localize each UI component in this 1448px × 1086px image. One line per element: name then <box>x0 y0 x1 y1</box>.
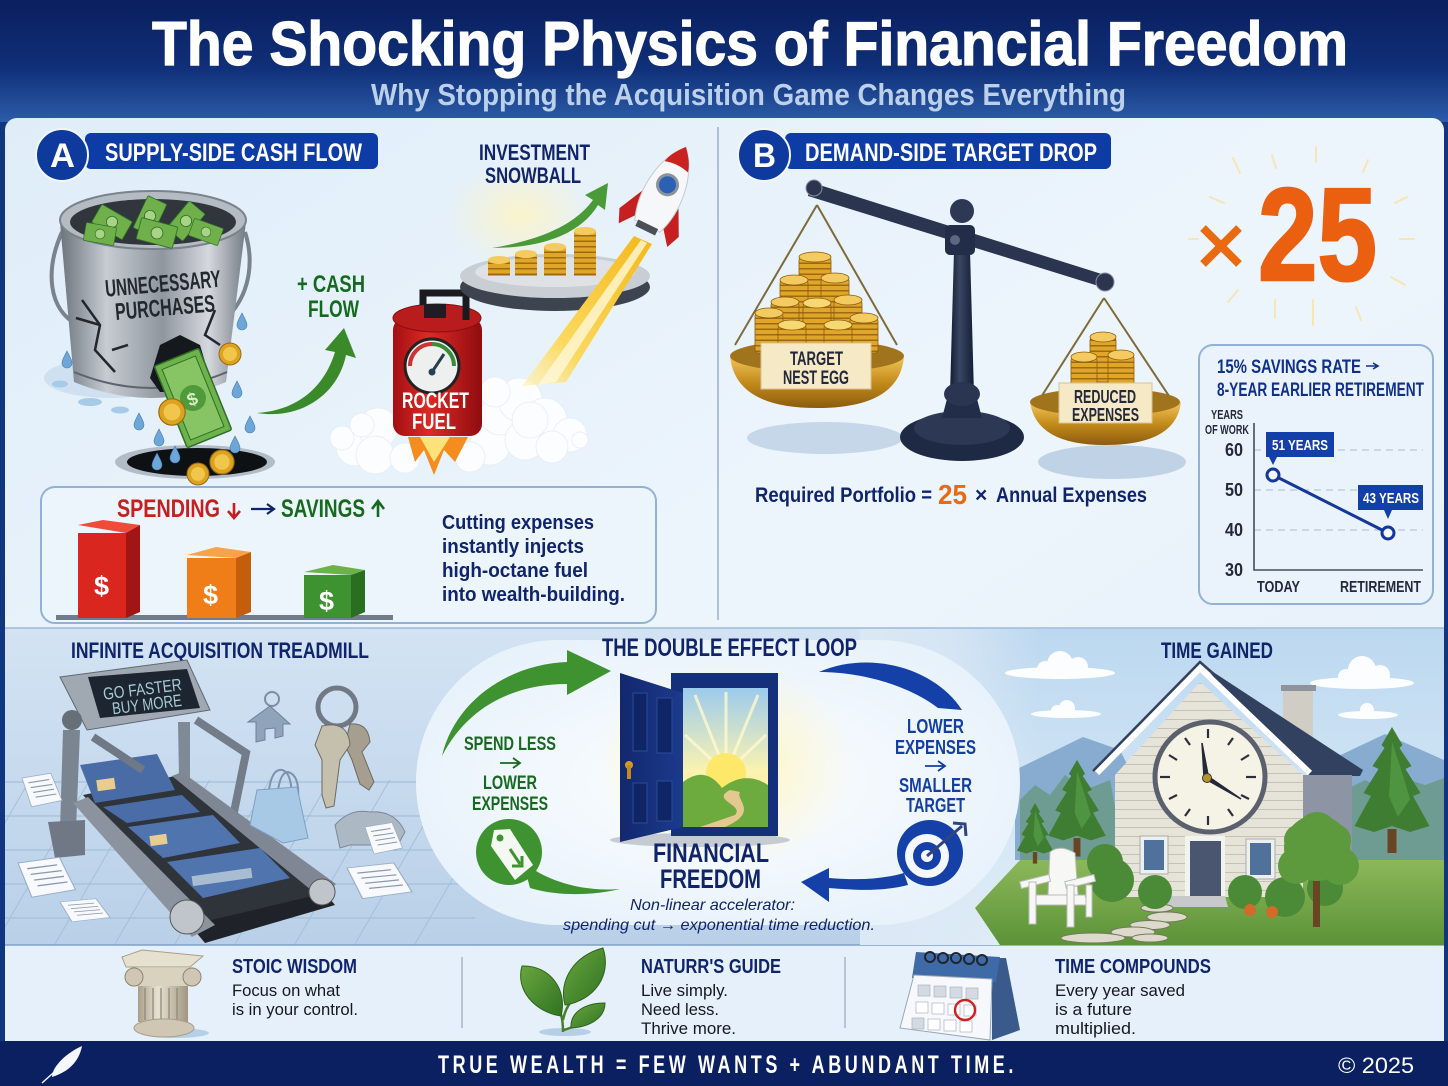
label on bucket <box>104 266 224 327</box>
text: spend less: EXPENSES <box>472 794 548 815</box>
icon: balance scale <box>730 180 1186 479</box>
copyright: © 2025 <box>1338 1053 1414 1078</box>
arrow: investment growth <box>492 183 608 248</box>
title: The Shocking Physics of Financial Freedom <box>152 10 1348 79</box>
chart title <box>1217 357 1424 401</box>
text: stoic wisdom: Focus on what <box>232 982 340 1000</box>
label on bucket: UNNECESSARY <box>104 266 222 303</box>
treadmill display text: BUY MORE <box>111 691 183 718</box>
formula: × <box>975 484 987 507</box>
icon: leaking bucket <box>44 191 275 485</box>
text: cutting expenses: instantly injects <box>442 536 584 558</box>
badge A: A <box>50 137 75 175</box>
text: time compounds: Every year saved <box>1055 982 1185 1000</box>
text: smaller target: EXPENSES <box>895 737 976 759</box>
mountains <box>1015 734 1444 860</box>
panel: spending vs savings box <box>41 487 656 623</box>
text: stoic wisdom: STOIC WISDOM <box>232 956 357 978</box>
treadmill heading: INFINITE ACQUISITION TREADMILL <box>71 638 369 663</box>
badge A: SUPPLY-SIDE CASH FLOW <box>105 139 362 167</box>
chart axes and values: 60 <box>1225 440 1243 460</box>
text: spend less <box>464 734 556 815</box>
text: non-linear accelerator: Non-linear accelerator: <box>630 897 795 914</box>
chart axes and values: OF WORK <box>1205 423 1249 437</box>
panel: section B demand-side target drop <box>730 129 1433 604</box>
panel: years of work line chart <box>1199 345 1433 604</box>
label: cash flow: + CASH <box>297 271 365 298</box>
text: nature's guide <box>641 956 781 1038</box>
text: cutting expenses <box>442 512 625 606</box>
text: spend less: SPEND LESS <box>464 734 556 755</box>
panel: double effect loop <box>442 634 976 934</box>
lawn <box>975 860 1444 945</box>
chart axes and values: 30 <box>1225 560 1243 580</box>
icon: rocket fuel can with clouds: FUEL <box>412 409 456 434</box>
tagline: TRUE WEALTH = FEW WANTS + ABUNDANT TIME. <box>438 1051 1017 1079</box>
chart axes and values <box>1205 408 1423 596</box>
badge A <box>36 129 378 181</box>
footer band <box>0 1041 1448 1086</box>
arrow: blue bottom <box>801 868 908 902</box>
clouds <box>1005 651 1414 719</box>
left pan with coins: NEST EGG <box>783 368 849 389</box>
icon: game controller <box>335 811 405 850</box>
icon: calendar <box>900 952 1020 1040</box>
panel: bottom wisdom strip <box>5 946 1444 1042</box>
icon: rocket fuel can with clouds <box>330 293 588 475</box>
chart axes and values: RETIREMENT <box>1340 579 1421 596</box>
chart axes and values: 51 YEARS <box>1272 437 1328 454</box>
clock on house <box>1155 722 1265 832</box>
icon: shopping bag <box>250 770 308 843</box>
icon: open door to sunrise <box>595 660 855 870</box>
icon: rocket fuel can with clouds: ROCKET <box>402 388 469 413</box>
icon: green plant <box>521 948 605 1036</box>
badge B: B <box>753 137 776 175</box>
badge B: DEMAND-SIDE TARGET DROP <box>805 139 1097 167</box>
label: time gained: TIME GAINED <box>1161 638 1273 663</box>
multiplier times 25 with rays: 25 <box>1258 161 1377 308</box>
formula: 25 <box>938 479 967 510</box>
right pan with coins <box>1030 298 1181 445</box>
left pan with coins <box>730 205 904 408</box>
label: cash flow: FLOW <box>308 296 359 323</box>
icon: treadmill <box>48 660 336 943</box>
text: nature's guide: Thrive more. <box>641 1020 736 1038</box>
chart title: 15% SAVINGS RATE <box>1217 357 1361 378</box>
icon: white adirondack chair <box>1020 848 1096 927</box>
text: stoic wisdom: is in your control. <box>232 1001 358 1019</box>
icon: rocket <box>613 133 716 250</box>
icon: keys <box>315 688 374 808</box>
icon: target <box>897 820 966 886</box>
bar chart: spending to savings <box>56 520 393 620</box>
text: smaller target: LOWER <box>907 716 964 738</box>
loop heading: THE DOUBLE EFFECT LOOP <box>602 634 857 662</box>
text: nature's guide: Live simply. <box>641 982 728 1000</box>
multiplier times 25 with rays <box>1189 147 1414 325</box>
label: investment snowball: SNOWBALL <box>485 163 581 188</box>
subtitle: Why Stopping the Acquisition Game Changes Everything <box>371 77 1126 112</box>
bar chart: spending to savings: $ <box>203 580 218 610</box>
icon: house charm <box>248 692 290 742</box>
text: smaller target: TARGET <box>906 795 965 817</box>
arrow: blue top <box>819 663 962 710</box>
text: financial freedom: FREEDOM <box>660 864 761 894</box>
soft glow behind snowball <box>445 160 595 270</box>
text: time compounds: TIME COMPOUNDS <box>1055 956 1211 978</box>
icon: price tag <box>476 819 542 885</box>
chart axes and values: TODAY <box>1257 579 1300 596</box>
trees and shrubs <box>1017 727 1430 927</box>
text: non-linear accelerator: spending cut → exponential time reduction. <box>563 917 875 934</box>
text: time compounds <box>1055 956 1211 1038</box>
arrow: green top <box>442 650 611 756</box>
path stones <box>1061 904 1187 943</box>
text: stoic wisdom <box>232 956 358 1019</box>
text: financial freedom: FINANCIAL <box>653 838 769 868</box>
label on bucket: PURCHASES <box>114 290 216 326</box>
formula <box>755 479 1147 510</box>
bar chart: spending to savings: $ <box>94 571 109 601</box>
badge B <box>738 129 1111 181</box>
spending savings heading: SPENDING <box>117 495 220 523</box>
icon: feather <box>42 1046 82 1083</box>
text: nature's guide: NATURR'S GUIDE <box>641 956 781 978</box>
icon: stone column <box>122 950 209 1038</box>
icon: coin staircase investment snowball <box>460 227 650 311</box>
treadmill display text: GO FASTER <box>102 675 183 704</box>
text: smaller target <box>895 716 976 817</box>
label: investment snowball: INVESTMENT <box>479 140 590 165</box>
text: time compounds: is a future <box>1055 1001 1132 1019</box>
icon: house with clock <box>1093 662 1363 907</box>
icon: leaking bucket: $ <box>184 388 201 410</box>
text: time compounds: multiplied. <box>1055 1020 1136 1038</box>
text: cutting expenses: into wealth-building. <box>442 584 625 606</box>
arrow: cash flow <box>257 328 356 414</box>
text: financial freedom <box>653 838 769 894</box>
label: investment snowball <box>479 140 590 188</box>
formula: Annual Expenses <box>996 484 1147 507</box>
arrow: green bottom <box>523 862 620 894</box>
panel: middle illustration band <box>5 628 1444 945</box>
icon: receipts <box>18 773 412 922</box>
text: spend less: LOWER <box>483 773 537 794</box>
text: non-linear accelerator <box>563 897 875 934</box>
text: cutting expenses: Cutting expenses <box>442 512 594 534</box>
spending savings heading: SAVINGS <box>281 495 365 523</box>
bar chart: spending to savings: $ <box>319 586 334 616</box>
panel: infinite acquisition treadmill <box>18 638 412 943</box>
text: nature's guide: Need less. <box>641 1001 719 1019</box>
panel: double effect loop backdrop <box>416 640 1020 925</box>
label: cash flow <box>297 271 365 323</box>
chart axes and values: YEARS <box>1211 408 1243 422</box>
text: cutting expenses: high-octane fuel <box>442 560 588 582</box>
panel: time gained scene <box>860 629 1444 945</box>
formula: Required Portfolio = <box>755 484 932 507</box>
left pan with coins: TARGET <box>790 349 843 370</box>
rocket exhaust beam <box>522 236 652 386</box>
panel: section A supply-side cash flow <box>36 129 716 623</box>
chart axes and values: 40 <box>1225 520 1243 540</box>
chart axes and values: 43 YEARS <box>1363 490 1419 507</box>
chart axes and values: 50 <box>1225 480 1243 500</box>
spending savings heading <box>117 495 384 523</box>
header band <box>0 0 1448 122</box>
treadmill display text <box>102 675 183 718</box>
right pan with coins: REDUCED <box>1074 387 1136 407</box>
text: smaller target: SMALLER <box>899 775 972 797</box>
right pan with coins: EXPENSES <box>1072 405 1139 425</box>
